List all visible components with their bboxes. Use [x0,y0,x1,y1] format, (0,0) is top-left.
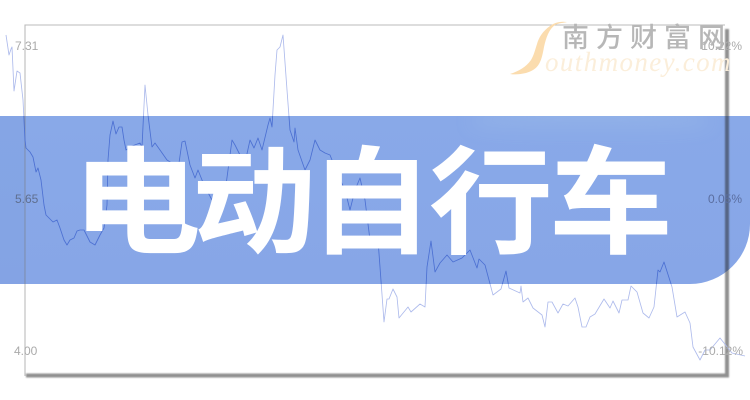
left axis labels: 7.31 [15,39,39,53]
watermark: southmoney logo [510,22,732,77]
blue title band [0,116,750,284]
title: 自 [309,139,433,269]
title: 动 [192,139,316,269]
left axis labels: 5.65 [15,192,39,206]
right axis labels: 10.22% [701,39,742,53]
right axis labels [698,39,743,358]
logo chinese name: 南方财富网 [562,23,732,53]
logo url text: outhmoney.com [545,47,732,77]
title: 行 [429,139,553,269]
title [72,139,673,270]
right axis labels: -10.12% [698,344,743,358]
band top highlight [470,106,710,138]
title: 电 [72,140,201,270]
band left edge tint [0,116,25,284]
right axis labels: 0.05% [708,192,742,206]
title: 车 [549,139,673,269]
left axis labels [14,39,39,358]
logo swoosh S [510,22,567,74]
left axis labels: 4.00 [14,344,38,358]
